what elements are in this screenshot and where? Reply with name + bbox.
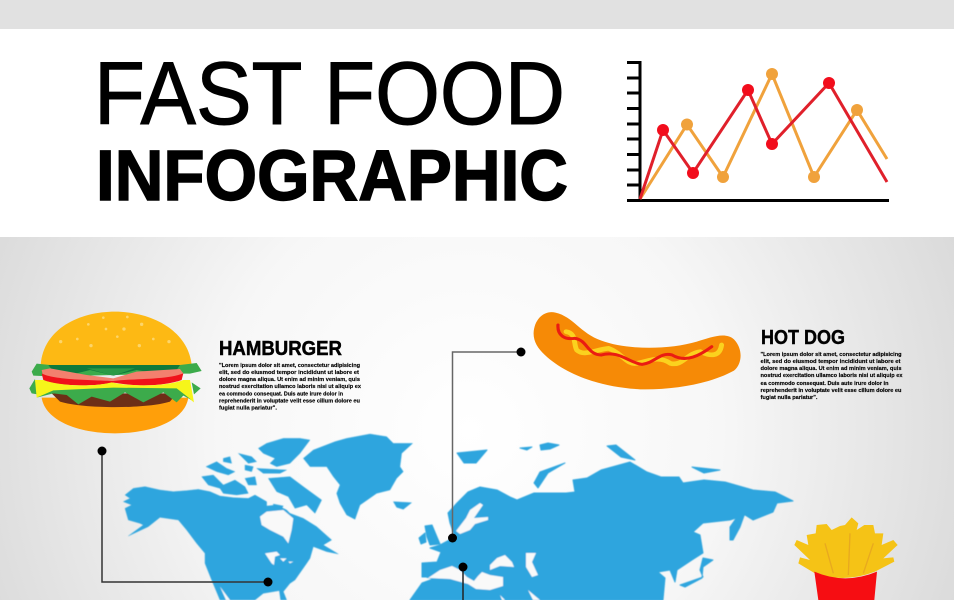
body copy: nostrud exercitation ullamco laboris nisi ut aliquip ex	[760, 373, 903, 379]
bun	[534, 312, 741, 389]
line chart	[627, 61, 889, 202]
North America	[123, 438, 338, 600]
fries	[794, 517, 898, 578]
body copy: reprehenderit in voluptate velit esse cillum dolore eu	[219, 398, 361, 404]
top bun	[41, 312, 192, 365]
body copy: nostrud exercitation ullamco laboris nisi ut aliquip ex	[219, 384, 362, 390]
chart axes	[627, 61, 889, 202]
body copy: dolore magna aliqua. Ut enim ad minim veniam, quis	[760, 366, 902, 372]
mustard	[566, 332, 722, 364]
lower panel background	[0, 237, 954, 600]
dark lettuce	[48, 365, 180, 376]
ham	[42, 368, 183, 383]
upper lettuce	[32, 363, 202, 376]
carton	[814, 572, 877, 600]
sesame seeds	[59, 316, 171, 347]
Japan	[680, 558, 713, 587]
connector: hamburger	[98, 446, 272, 586]
body copy: reprehenderit in voluptate velit esse cillum dolore eu	[760, 388, 902, 394]
title	[94, 43, 568, 216]
Kamchatka side island	[730, 513, 745, 540]
red series	[640, 77, 887, 199]
text: hamburger	[219, 338, 362, 412]
body copy: dolore magna aliqua. Ut enim ad minim veniam, quis	[219, 377, 360, 383]
body copy: ea commodo consequat. Duis aute irure dolor in	[219, 392, 344, 398]
body copy: ea commodo consequat. Duis aute irure dolor in	[760, 381, 889, 387]
body copy	[760, 352, 903, 401]
icon: hot dog	[534, 312, 741, 389]
body copy: fugiat nulla pariatur".	[219, 406, 277, 412]
icon: hamburger	[29, 312, 202, 433]
header panel	[0, 29, 954, 237]
patty	[52, 393, 177, 407]
fry shading	[825, 533, 873, 575]
text: hot dog	[760, 327, 903, 401]
body copy: fugiat nulla pariatur".	[760, 395, 818, 401]
body copy: "Lorem ipsum dolor sit amet, consectetur adipisicing	[760, 352, 902, 358]
cheese	[35, 380, 194, 402]
body copy: "Lorem ipsum dolor sit amet, consectetur adipisicing	[219, 363, 361, 369]
heading: HAMBURGER	[219, 338, 343, 360]
title: FAST FOOD	[94, 43, 565, 143]
Greenland and Iceland	[303, 434, 413, 519]
map water cut-outs	[220, 503, 540, 600]
tomato	[42, 373, 183, 385]
orange series	[640, 68, 887, 199]
bottom bun	[42, 398, 188, 433]
connector: fries	[458, 562, 468, 600]
Eurasia and Africa	[410, 462, 793, 600]
body copy: elit, sed do eiusmod tempor incididunt ut labore et	[760, 359, 901, 365]
top grey band	[0, 0, 954, 29]
side lettuce	[29, 379, 201, 394]
body copy: elit, sed do eiusmod tempor incididunt ut labore et	[219, 370, 359, 376]
lower lettuce	[37, 388, 192, 404]
icon: french fries	[794, 517, 898, 600]
body copy	[219, 363, 362, 412]
Britain and Ireland	[425, 525, 440, 545]
world map	[123, 434, 793, 600]
heading: HOT DOG	[761, 327, 845, 349]
Arctic and Atlantic islands	[534, 463, 565, 488]
ketchup	[558, 325, 712, 364]
title: INFOGRAPHIC	[96, 137, 568, 216]
connector: hot dog	[448, 348, 526, 542]
